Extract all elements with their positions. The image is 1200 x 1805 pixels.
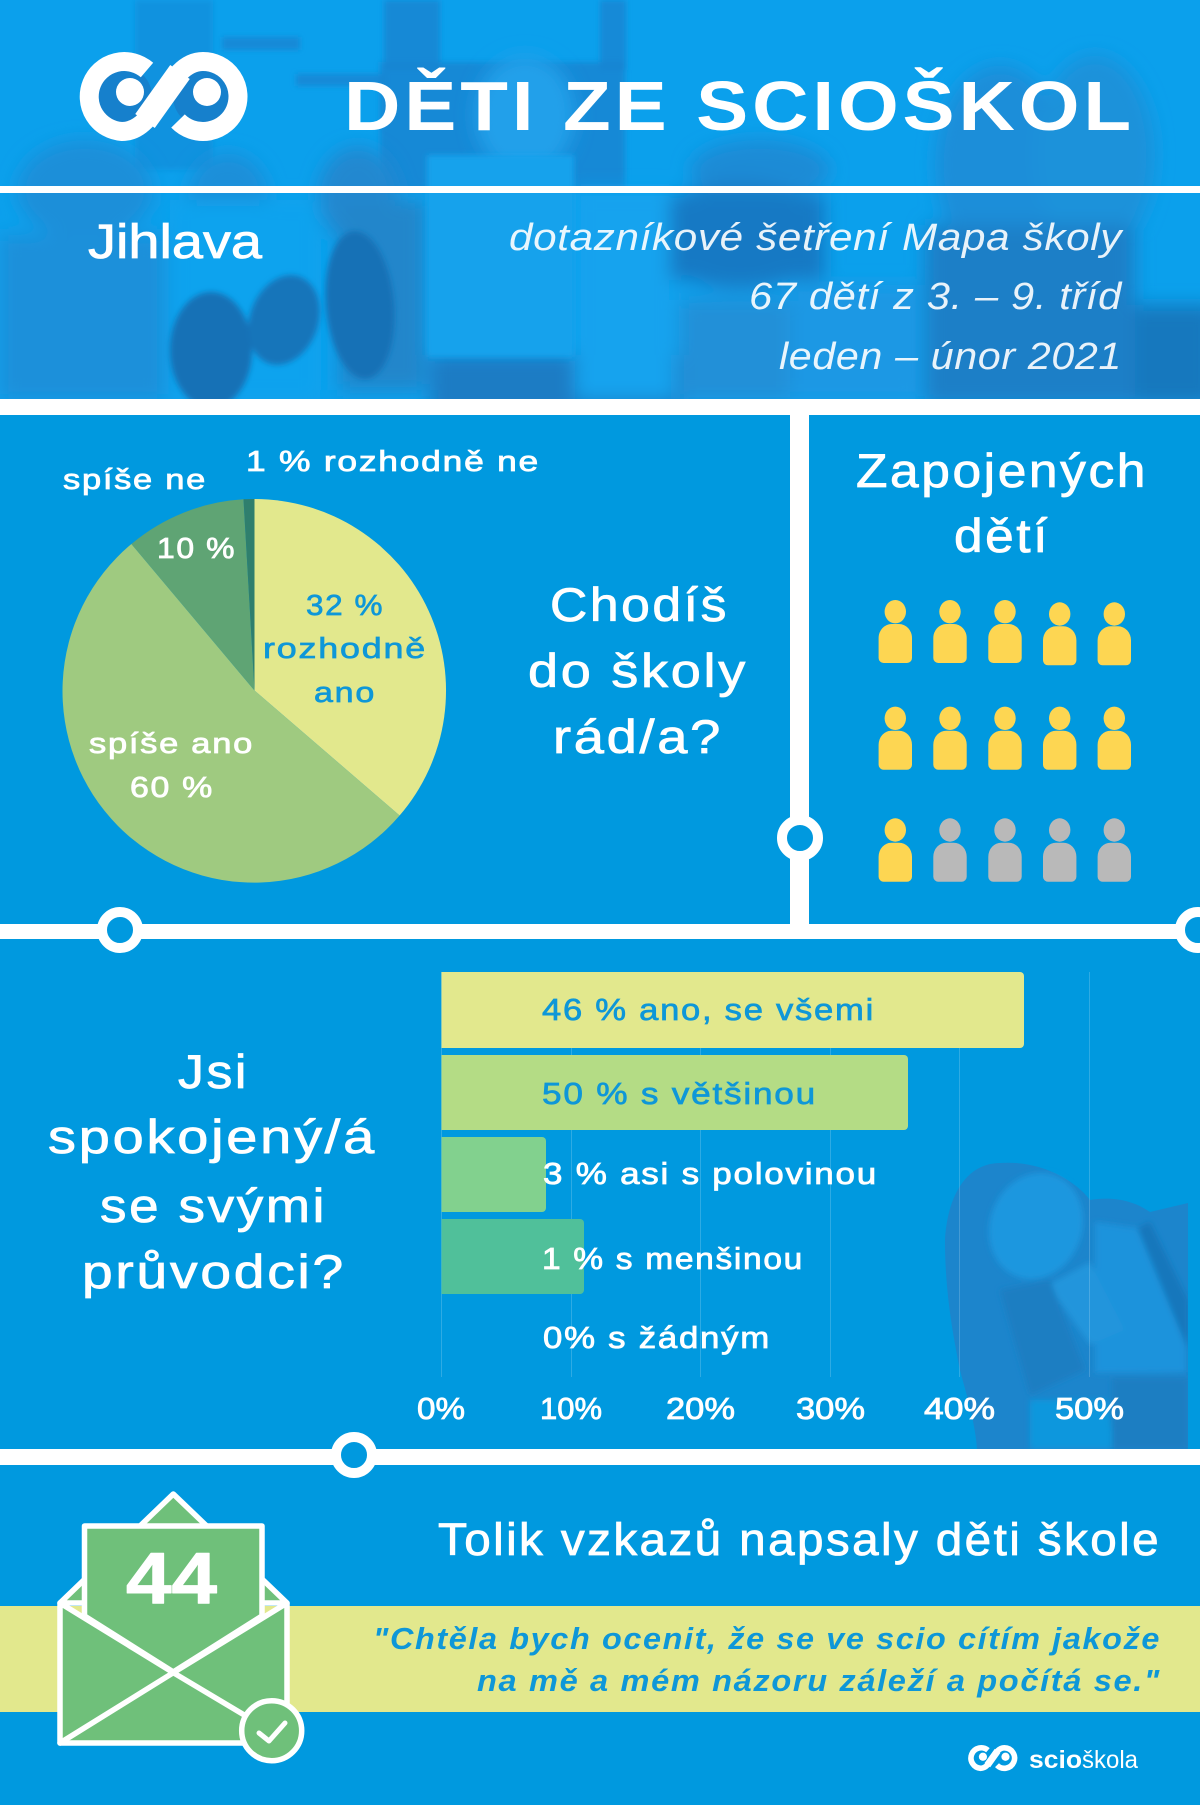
- pie labels: 10 %: [157, 533, 236, 565]
- quote text: "Chtěla bych ocenit, že se ve scio cítím jakože: [373, 1621, 1161, 1656]
- icon: open envelope with 44 messages: [60, 1494, 302, 1761]
- bar chart: Jsi spokojený/á se svými průvodci: [417, 972, 1124, 1426]
- heading: Zapojených dětí: dětí: [954, 509, 1050, 562]
- question: Jsi spokojený/á se svými průvodci: Jsi: [178, 1045, 249, 1098]
- axis labels: [417, 1391, 1124, 1426]
- footer logo: scioškola: scio: [1029, 1746, 1082, 1774]
- icon: check badge: [242, 1701, 302, 1761]
- footer logo: scioškola: [971, 1746, 1138, 1774]
- pie chart: Chodíš do školy rád/a: [62, 446, 540, 883]
- heading: Zapojených dětí: Zapojených: [856, 444, 1148, 497]
- bar labels: 0% s žádným: [543, 1320, 771, 1355]
- question: Chodíš do školy: rád/a?: [553, 710, 723, 763]
- header photo background: [0, 0, 1200, 415]
- survey details: leden – únor 2021: [779, 336, 1122, 378]
- panel: frame lines: [0, 399, 1200, 1473]
- bar labels: [542, 992, 878, 1355]
- survey details: [509, 217, 1124, 378]
- pie labels: rozhodně: [263, 633, 427, 665]
- survey details: 67 dětí z 3. – 9. tříd: [749, 276, 1123, 318]
- question: Jsi spokojený/á se svými průvodci: [48, 1045, 377, 1298]
- question: Chodíš do školy: [528, 578, 748, 763]
- axis labels: 30%: [796, 1391, 865, 1426]
- message count: 44: [126, 1539, 217, 1619]
- bar labels: 1 % s menšinou: [542, 1241, 804, 1276]
- pie labels: 60 %: [130, 772, 214, 804]
- question: Jsi spokojený/á se svými průvodci: spokojený/á: [48, 1110, 377, 1163]
- question: Chodíš do školy: do školy: [528, 644, 748, 697]
- pie labels: ano: [314, 677, 376, 709]
- pictogram: children involved: [879, 600, 1131, 882]
- city name: Jihlava: [88, 216, 262, 269]
- title divider line: [0, 186, 1200, 193]
- axis labels: 10%: [540, 1391, 602, 1426]
- pie labels: [63, 446, 540, 804]
- heading: Tolik vzkazů: Tolik vzkazů napsaly děti škole: [438, 1514, 1161, 1565]
- axis labels: 40%: [924, 1391, 995, 1426]
- footer logo: scioškola: škola: [1082, 1746, 1138, 1774]
- quote text: [373, 1621, 1161, 1698]
- quote band: [0, 1606, 1200, 1712]
- survey details: dotazníkové šetření Mapa školy: [509, 217, 1124, 259]
- question: Jsi spokojený/á se svými průvodci: se svými: [100, 1179, 327, 1232]
- photo: smiling girl: [945, 1160, 1188, 1449]
- pie labels: spíše ne: [63, 464, 207, 496]
- bar labels: 3 % asi s polovinou: [543, 1156, 878, 1191]
- axis labels: 20%: [666, 1391, 735, 1426]
- heading: Zapojených dětí: [856, 444, 1148, 562]
- pie labels: 1 % rozhodně ne: [246, 446, 540, 478]
- quote text: na mě a mém názoru záleží a počítá se.": [477, 1663, 1161, 1698]
- axis labels: 0%: [417, 1391, 465, 1426]
- pie labels: 32 %: [306, 590, 384, 622]
- question: Jsi spokojený/á se svými průvodci: průvodci?: [82, 1245, 346, 1298]
- title: DĚTI ZE SCIOŠKOL: [344, 66, 1135, 145]
- pie labels: spíše ano: [89, 728, 254, 760]
- icon: infinity logo: [89, 62, 238, 132]
- bar labels: 46 % ano, se všemi: [542, 992, 875, 1027]
- bar labels: 50 % s většinou: [542, 1076, 817, 1111]
- axis labels: 50%: [1055, 1391, 1124, 1426]
- question: Chodíš do školy: Chodíš: [550, 578, 729, 631]
